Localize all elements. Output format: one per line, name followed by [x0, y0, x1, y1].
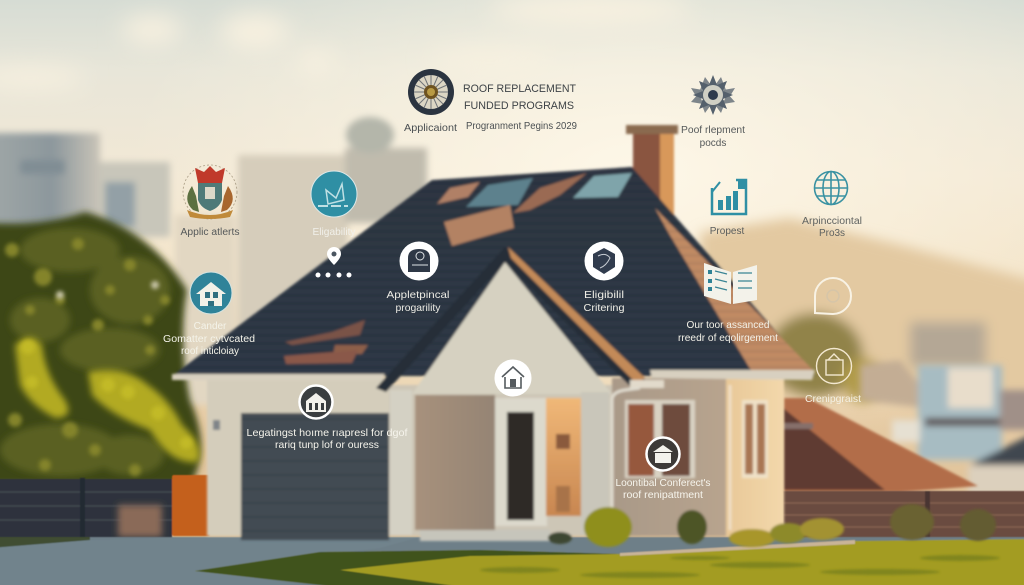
- icon: applicant badge: [400, 242, 438, 280]
- caption: Crenipgraist: Crenipgraist: [805, 393, 861, 405]
- damaged shingles: [284, 173, 632, 364]
- caption: Poof rlepment pocds: [681, 125, 745, 149]
- porch gable wall: [412, 262, 612, 394]
- caption: Our toor assanced: Our toor assanced: [686, 319, 770, 331]
- caption: Arpincciontal Pross: [802, 216, 862, 239]
- caption: Loontibal Conferect's: roof renipattment: [623, 489, 703, 501]
- caption: Cander: Gomatter cytvcated: [163, 334, 255, 345]
- porch: [390, 390, 609, 535]
- caption: Cander: [163, 321, 255, 357]
- right roof orange slope: [655, 208, 815, 372]
- distant hills right: [700, 218, 1024, 402]
- icon: loan badge: [646, 438, 680, 470]
- distant buildings left: [0, 117, 427, 405]
- chimney: [626, 125, 678, 217]
- icon: white house badge: [494, 360, 532, 396]
- walls: [207, 378, 784, 536]
- icon: basket seal: [816, 348, 852, 384]
- garage door: [213, 413, 389, 540]
- caption: Propest: Propest: [710, 226, 744, 237]
- caption: Arpincciontal Pross: Pro3s: [819, 228, 845, 239]
- caption: Poof rlepment pocds: pocds: [700, 138, 726, 149]
- icon: open book: [704, 263, 757, 304]
- caption: Eligibilil Critering: Critering: [584, 302, 625, 314]
- caption: Our toor assanced: [678, 319, 778, 344]
- fences: [0, 475, 1024, 543]
- caption: Loontibal Conferect's: Loontibal Conferect's: [616, 477, 710, 489]
- header title: [463, 83, 576, 112]
- main roof: [172, 167, 815, 376]
- caption: Legatingst home rapresl: rariq tunp lof or ouress: [275, 439, 379, 451]
- eave: [630, 380, 664, 388]
- ground and lawn: [0, 537, 1024, 585]
- caption: Loontibal Conferect's: [616, 477, 710, 501]
- icon: house badge: [190, 272, 232, 314]
- header captions: Progranment Pegins 2029: [466, 120, 577, 132]
- lawn texture: [480, 555, 1000, 578]
- header captions: [404, 120, 577, 134]
- icon: flower seal: [691, 75, 735, 115]
- icon: eligibility badge: [311, 171, 357, 217]
- header captions: Applicaiont: [404, 122, 457, 134]
- header title: FUNDED PROGRAMS: [464, 100, 574, 112]
- front step: [420, 530, 550, 541]
- eaves: [172, 370, 815, 380]
- caption: Cander: Cander: [194, 321, 227, 332]
- icon: bar chart: [712, 179, 746, 214]
- distant houses right: [860, 360, 1024, 495]
- caption: Poof rlepment pocds: Poof rlepment: [681, 125, 745, 136]
- caption: Legatingst home rapresl: [246, 427, 408, 451]
- caption: Applic atlerts: Applic atlerts: [180, 227, 240, 238]
- caption: Eligibilil Critering: [584, 289, 625, 314]
- caption: Eligability: Eligability: [312, 226, 356, 238]
- caption: Appletpincal progarility: Appletpincal: [386, 289, 450, 301]
- header title: ROOF REPLACEMENT: [463, 83, 576, 95]
- icon: globe: [814, 172, 848, 204]
- header emblem: [408, 69, 454, 115]
- icon: legal building badge: [300, 386, 332, 418]
- caption: Appletpincal progarility: [386, 289, 450, 314]
- icon: eligibility hexagon: [584, 242, 624, 280]
- icon: map pin with dots: [316, 247, 352, 278]
- caption: Eligibilil Critering: Eligibilil: [584, 289, 624, 301]
- caption: Legatingst home rapresl: Legatingst hoıme rıapresl for dgof: [246, 427, 408, 439]
- house: [172, 125, 996, 547]
- tree: [0, 212, 201, 485]
- neighbouring orange roof: [783, 398, 978, 492]
- icon: speech bubble: [815, 278, 851, 314]
- caption: Arpincciontal Pross: Arpincciontal: [802, 216, 862, 227]
- gable roof edge: [376, 247, 645, 392]
- side windows: [612, 385, 768, 530]
- caption: Cander: roof inticloiay: [181, 346, 239, 357]
- caption: Our toor assanced: rreedr of eqolirgement: [678, 332, 778, 344]
- icon: crest: [183, 165, 237, 219]
- caption: Appletpincal progarility: progarility: [396, 302, 441, 314]
- shrubs: [548, 504, 996, 547]
